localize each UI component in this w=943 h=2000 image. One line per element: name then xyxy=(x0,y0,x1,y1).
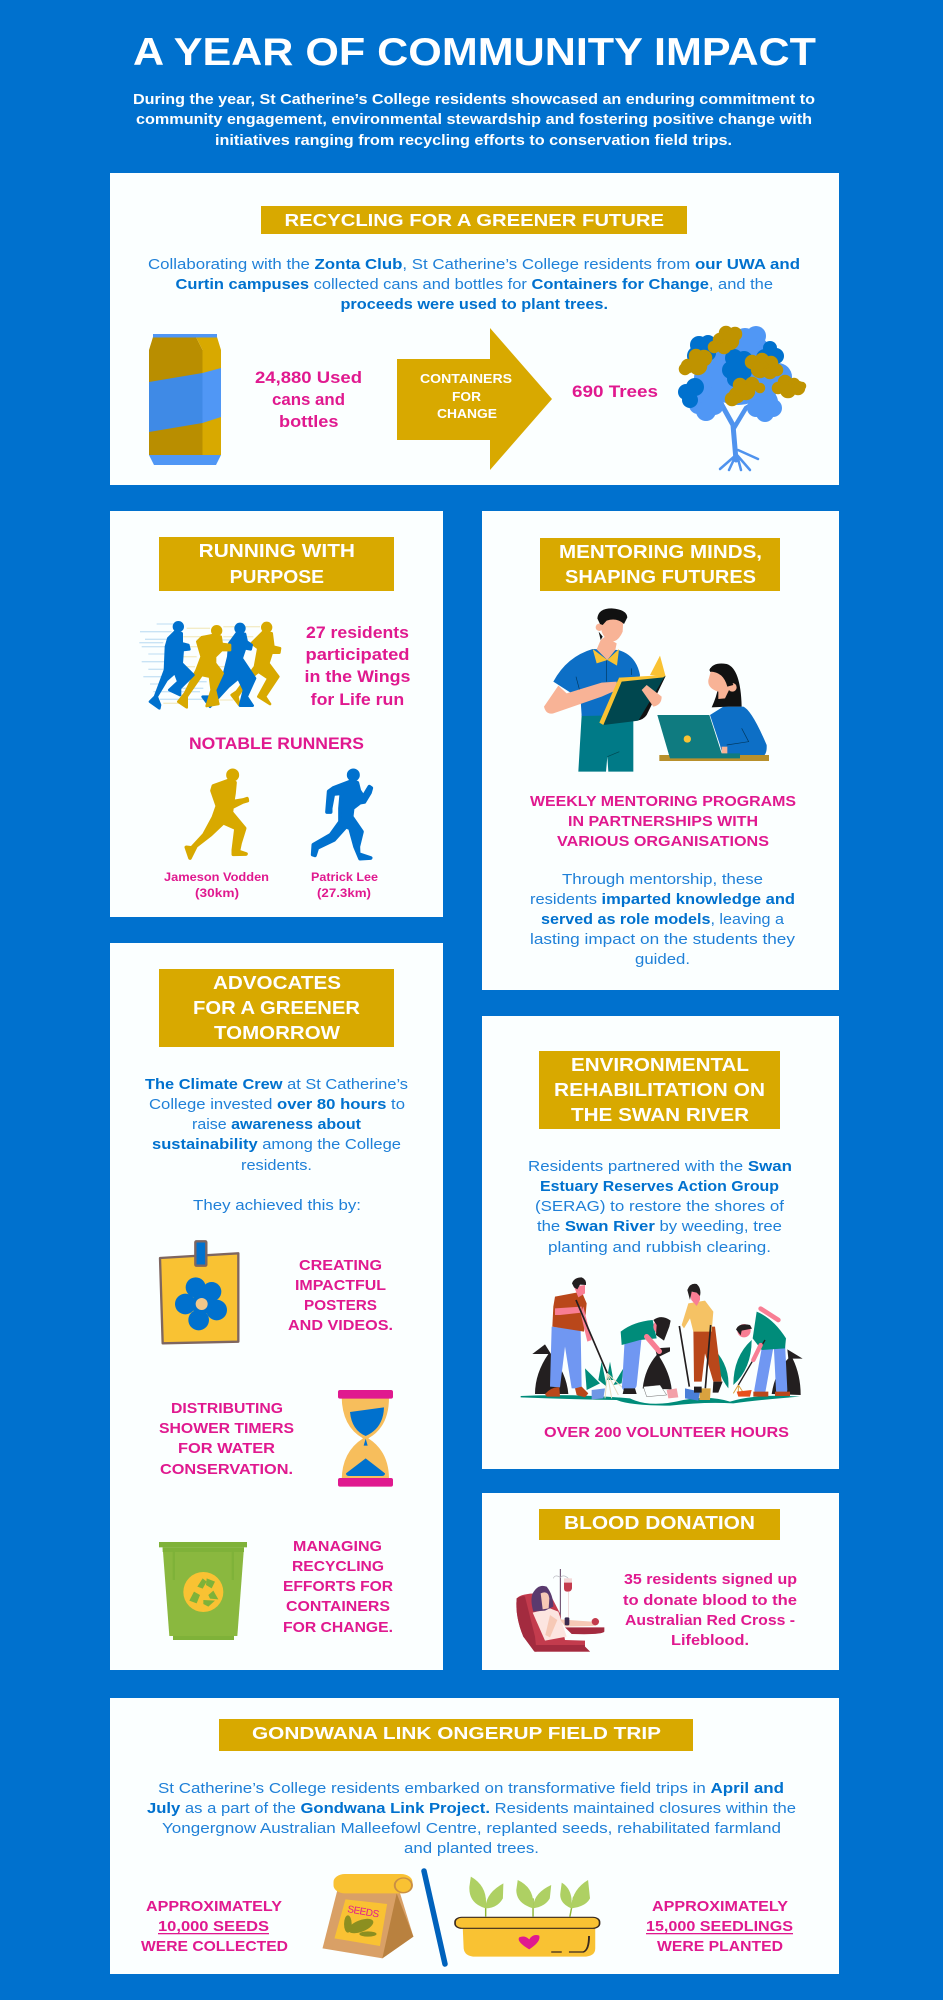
text: shower timers xyxy=(159,1400,294,1478)
recycling description: Curtin campuses collected cans and bottles for Containers for Change , and the xyxy=(176,276,773,293)
heading: environmental xyxy=(539,1051,780,1129)
stat: seeds collected: 10,000 SEEDS xyxy=(158,1918,269,1935)
runner: Jameson Vodden xyxy=(164,770,269,900)
woman xyxy=(679,1284,723,1401)
arrow: containers for change: FOR xyxy=(452,390,481,404)
advocates description: raise awareness about xyxy=(192,1116,361,1133)
gondwana description: Yongergnow Australian Malleefowl Centre, replanted seeds, rehabilitated farmland xyxy=(162,1820,781,1837)
stat: wings for life: 27 residents xyxy=(306,624,409,642)
icon: hourglass xyxy=(338,1390,393,1487)
heading: environmental: THE SWAN RIVER xyxy=(571,1104,749,1125)
panel: blood donation xyxy=(482,1493,839,1670)
text: blood donation stat: Lifeblood. xyxy=(671,1632,749,1649)
text: managing recycling: EFFORTS FOR xyxy=(283,1578,393,1595)
text: blood donation stat: 35 residents signed up xyxy=(624,1571,797,1588)
mentoring description: lasting impact on the students they xyxy=(530,931,796,948)
gondwana description: St Catherine’s College residents embarked on transformative field trips in April and xyxy=(158,1780,784,1797)
callout: weekly mentoring xyxy=(530,793,796,850)
mentoring description: residents imparted knowledge and xyxy=(530,891,795,908)
advocates description: College invested over 80 hours to xyxy=(149,1096,405,1113)
advocates description: residents. xyxy=(241,1157,312,1174)
runner: Patrick Lee: Patrick Lee xyxy=(311,870,378,884)
heading: running: PURPOSE xyxy=(230,566,324,587)
callout: weekly mentoring: VARIOUS ORGANISATIONS xyxy=(557,833,769,850)
text: creating posters: CREATING xyxy=(299,1257,382,1274)
panel: gondwana link xyxy=(110,1698,839,1974)
advocates description: They achieved this by: xyxy=(193,1197,361,1214)
advocates description: sustainability among the College xyxy=(152,1136,401,1153)
text: managing recycling xyxy=(283,1538,393,1636)
intro text xyxy=(133,91,815,149)
stat: seeds collected: APPROXIMATELY xyxy=(146,1898,282,1915)
icon: tree xyxy=(678,326,805,470)
heading: gondwana: GONDWANA LINK ONGERUP FIELD TRIP xyxy=(252,1723,661,1743)
stat: used cans xyxy=(255,369,362,431)
icon: recycling bin xyxy=(159,1542,247,1640)
callout: weekly mentoring: IN PARTNERSHIPS WITH xyxy=(568,813,758,830)
environmental description: (SERAG) to restore the shores of xyxy=(535,1198,785,1215)
callout: weekly mentoring: WEEKLY MENTORING PROGRAMS xyxy=(530,793,796,810)
arrow: containers for change xyxy=(397,328,552,470)
text: blood donation stat: to donate blood to the xyxy=(623,1592,797,1609)
text: managing recycling: MANAGING xyxy=(293,1538,382,1555)
heading: recycling: RECYCLING FOR A GREENER FUTURE xyxy=(284,210,664,230)
heading: blood donation xyxy=(539,1509,780,1540)
text: creating posters: AND VIDEOS. xyxy=(288,1317,393,1334)
heading: environmental: ENVIRONMENTAL xyxy=(571,1054,749,1075)
text: shower timers: CONSERVATION. xyxy=(160,1461,293,1478)
text: shower timers: FOR WATER xyxy=(178,1440,275,1457)
stat: used cans: bottles xyxy=(279,413,338,431)
man 3 xyxy=(733,1309,790,1397)
heading: mentoring xyxy=(540,538,780,591)
gondwana description xyxy=(147,1780,796,1857)
text: managing recycling: RECYCLING xyxy=(292,1558,384,1575)
environmental description: Residents partnered with the Swan xyxy=(528,1158,792,1175)
runner: Patrick Lee: (27.3km) xyxy=(317,886,371,900)
stat: wings for life: in the Wings xyxy=(304,668,410,686)
recycling description: Collaborating with the Zonta Club , St Catherine’s College residents from our UWA and xyxy=(148,256,800,273)
mentoring description xyxy=(530,871,796,968)
heading: advocates: FOR A GREENER xyxy=(193,997,360,1018)
arrow: containers for change: CHANGE xyxy=(437,407,497,421)
recycling description xyxy=(148,256,800,313)
gondwana description: and planted trees. xyxy=(404,1840,539,1857)
text: managing recycling: FOR CHANGE. xyxy=(283,1619,393,1636)
heading: gondwana xyxy=(219,1719,693,1751)
environmental description xyxy=(528,1158,792,1256)
runner: Patrick Lee xyxy=(311,770,378,900)
stat: used cans: cans and xyxy=(272,391,345,409)
runner: Jameson Vodden: Jameson Vodden xyxy=(164,870,269,884)
runner: Jameson Vodden: (30km) xyxy=(195,886,239,900)
stat: seedlings planted: WERE PLANTED xyxy=(657,1938,783,1955)
text: shower timers: DISTRIBUTING xyxy=(171,1400,283,1417)
text: creating posters: POSTERS xyxy=(304,1297,377,1314)
mentoring description: Through mentorship, these xyxy=(562,871,763,888)
icon: poster note xyxy=(160,1241,238,1343)
icon: can xyxy=(149,334,221,465)
environmental description: Estuary Reserves Action Group xyxy=(540,1178,779,1195)
stat: wings for life: for Life run xyxy=(311,691,404,709)
panel: recycling xyxy=(110,173,839,485)
stat: seedlings planted: APPROXIMATELY xyxy=(652,1898,788,1915)
icon: seed bag: SEEDS xyxy=(346,1904,380,1921)
heading: mentoring: MENTORING MINDS, xyxy=(559,541,762,562)
text: creating posters: IMPACTFUL xyxy=(295,1277,386,1294)
stat: volunteer hours: OVER 200 VOLUNTEER HOURS xyxy=(544,1424,789,1441)
stat: seeds collected: WERE COLLECTED xyxy=(141,1938,288,1955)
mentoring description: served as role models , leaving a xyxy=(541,911,785,928)
heading: running: RUNNING WITH xyxy=(199,540,355,561)
heading: advocates: ADVOCATES xyxy=(213,972,341,993)
advocates description xyxy=(145,1076,408,1214)
stat: used cans: 24,880 Used xyxy=(255,369,362,387)
gondwana description: July as a part of the Gondwana Link Project. Residents maintained closures within the xyxy=(147,1800,796,1817)
intro text: initiatives ranging from recycling efforts to conservation field trips. xyxy=(215,132,732,149)
text: shower timers: SHOWER TIMERS xyxy=(159,1420,294,1437)
heading: advocates xyxy=(159,969,394,1047)
stat: trees: 690 Trees xyxy=(572,383,658,401)
illustration: volunteers clearing rubbish xyxy=(521,1277,803,1406)
intro text: During the year, St Catherine’s College residents showcased an enduring commitment to xyxy=(133,91,815,108)
heading: blood donation: BLOOD DONATION xyxy=(564,1512,755,1533)
text: managing recycling: CONTAINERS xyxy=(286,1598,390,1615)
heading: running xyxy=(159,537,394,591)
recycling description: proceeds were used to plant trees. xyxy=(340,296,608,313)
divider line xyxy=(424,1871,445,1964)
text: blood donation stat: Australian Red Cross - xyxy=(625,1612,795,1629)
icon: group of runners xyxy=(139,622,280,708)
stat: seedlings planted: 15,000 SEEDLINGS xyxy=(646,1918,793,1935)
advocates description: The Climate Crew at St Catherine’s xyxy=(145,1076,408,1093)
mentoring description: guided. xyxy=(635,951,690,968)
text: creating posters xyxy=(288,1257,393,1334)
environmental description: the Swan River by weeding, tree xyxy=(537,1218,782,1235)
environmental description: planting and rubbish clearing. xyxy=(548,1239,771,1256)
stat: wings for life xyxy=(304,624,410,709)
stat: seedlings planted xyxy=(646,1898,793,1955)
subheading: notable runners: NOTABLE RUNNERS xyxy=(189,734,364,753)
panel: running xyxy=(110,511,443,917)
stat: seeds collected xyxy=(141,1898,288,1955)
icon: seedling pot xyxy=(455,1877,600,1957)
heading: environmental: REHABILITATION ON xyxy=(554,1079,765,1100)
intro text: community engagement, environmental stewardship and fostering positive change with xyxy=(136,111,812,128)
icon: seed bag xyxy=(323,1874,413,1958)
panel: advocates xyxy=(110,943,443,1670)
man 1 xyxy=(545,1277,625,1398)
panel: mentoring xyxy=(482,511,839,990)
panel: environmental rehabilitation xyxy=(482,1016,839,1469)
heading: mentoring: SHAPING FUTURES xyxy=(565,566,756,587)
text: blood donation stat xyxy=(623,1571,797,1649)
title: A YEAR OF COMMUNITY IMPACT xyxy=(133,31,816,74)
man 2 xyxy=(621,1317,671,1394)
stat: wings for life: participated xyxy=(306,646,410,664)
heading: advocates: TOMORROW xyxy=(214,1022,341,1043)
illustration: mentor and student xyxy=(544,608,769,772)
heading: recycling xyxy=(261,206,687,234)
arrow: containers for change: CONTAINERS xyxy=(420,372,512,386)
illustration: blood donor xyxy=(516,1569,604,1652)
